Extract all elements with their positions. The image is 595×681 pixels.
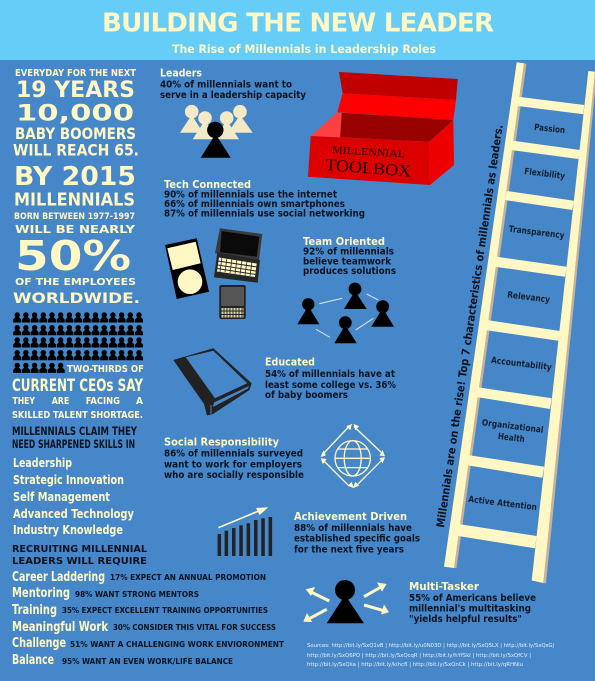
- icon: millennial toolbox: MILLENNIAL: [332, 145, 405, 160]
- panel: tech connected text: [164, 178, 365, 220]
- chart: ladder of characteristics: Passion: [534, 123, 565, 136]
- panel: recruiting requirements: 17% EXPECT AN ANNUAL PROMOTION: [110, 573, 266, 582]
- panel: educated text: of baby boomers: [265, 390, 348, 401]
- icon: tech devices: [165, 228, 262, 319]
- panel: recruiting requirements: [12, 544, 284, 668]
- icon: globe with arrows: [322, 425, 384, 487]
- sources: Sources: http://bit.ly/SxQ1vB | http://bit.ly/u0N03D | http://bit.ly/SxQ5LX | http://bit.ly/SxQsGj: [307, 643, 554, 649]
- panel: CEO statistic: CURRENT CEOs SAY: [12, 376, 144, 395]
- panel: tech connected text: Tech Connected: [164, 178, 251, 191]
- panel: multi-tasker text: [409, 580, 536, 625]
- panel: achievement driven text: 88% of millennials have: [294, 523, 412, 534]
- panel: CEO statistic: A: [136, 396, 143, 407]
- panel: recruiting requirements: 35% EXPECT EXCELLENT TRAINING OPPORTUNITIES: [62, 606, 268, 615]
- panel: boomers statistics: WORLDWIDE.: [13, 291, 140, 307]
- icon: book: [173, 348, 252, 416]
- panel: skills millennials need: MILLENNIALS CLAIM THEY: [12, 424, 137, 438]
- panel: recruiting requirements: 95% WANT AN EVEN WORK/LIFE BALANCE: [62, 657, 233, 666]
- icon: leader pawns: [180, 105, 253, 158]
- panel: multi-tasker text: 55% of Americans believe: [409, 593, 536, 604]
- header band: [0, 0, 595, 60]
- panel: recruiting requirements: Career Laddering: [12, 570, 105, 585]
- panel: achievement driven text: for the next five years: [294, 544, 404, 556]
- panel: team oriented text: believe teamwork: [303, 256, 392, 268]
- panel: skills millennials need: Strategic Innovation: [13, 472, 124, 487]
- panel: skills millennials need: [12, 424, 137, 537]
- panel: boomers statistics: 10,000: [16, 102, 134, 126]
- panel: skills millennials need: Leadership: [13, 455, 72, 470]
- panel: leaders text: serve in a leadership capacity: [160, 90, 307, 101]
- panel: multi-tasker text: Multi-Tasker: [409, 580, 480, 593]
- panel: educated text: Educated: [265, 356, 315, 368]
- vertical caption: Millennials are on the rise! Top 7 characteristics of millennials as leaders.: [434, 124, 506, 528]
- panel: skills millennials need: Self Management: [13, 489, 110, 504]
- panel: boomers statistics: WILL REACH 65.: [13, 140, 139, 160]
- panel: boomers statistics: OF THE EMPLOYEES: [15, 277, 136, 288]
- panel: CEO statistic: TWO-THIRDS OF: [67, 364, 144, 375]
- chart: ladder of characteristics: Flexibility: [524, 167, 566, 182]
- panel: achievement driven text: Achievement Driven: [294, 510, 407, 523]
- panel: social responsibility text: who are socially responsible: [164, 470, 304, 481]
- icon: rising bar chart: [218, 507, 272, 556]
- panel: tech connected text: 90% of millennials use the internet: [164, 190, 337, 200]
- panel: recruiting requirements: 98% WANT STRONG MENTORS: [75, 590, 199, 599]
- panel: educated text: [265, 356, 396, 401]
- panel: boomers statistics: BY 2015: [14, 162, 136, 192]
- panel: team oriented text: produces solutions: [303, 266, 396, 277]
- panel: social responsibility text: want to work for employers: [164, 460, 302, 470]
- title: BUILDING THE NEW LEADER: [102, 8, 494, 38]
- panel: social responsibility text: [164, 436, 304, 481]
- icon: connected team: [297, 283, 394, 343]
- chart: ladder of characteristics: Relevancy: [507, 290, 551, 306]
- panel: recruiting requirements: 30% CONSIDER THIS VITAL FOR SUCCESS: [113, 623, 276, 632]
- chart: ladder of characteristics: Accountability: [490, 356, 552, 373]
- panel: recruiting requirements: Mentoring: [12, 586, 70, 601]
- sources: http://bit.ly/SxQiia | http://bit.ly/kihcfl | http://bit.ly/SxQnCk | http://bit.ly/qRHNiu: [307, 662, 523, 668]
- panel: boomers statistics: WILL BE NEARLY: [15, 223, 136, 236]
- chart: ladder of characteristics: Organizational: [481, 418, 544, 436]
- subtitle: The Rise of Millennials in Leadership Roles: [172, 42, 436, 56]
- icon: millennial toolbox: TOOLBOX: [325, 155, 412, 181]
- panel: team oriented text: [303, 235, 396, 277]
- chart: ladder of characteristics: Active Attention: [468, 495, 537, 513]
- panel: recruiting requirements: RECRUITING MILLENNIAL: [12, 544, 147, 555]
- chart: ladder of characteristics: Health: [497, 432, 525, 445]
- panel: boomers statistics: 50%: [15, 232, 131, 280]
- panel: CEO statistic: SKILLED TALENT SHORTAGE.: [12, 410, 143, 421]
- panel: educated text: least some college vs. 36%: [265, 380, 396, 391]
- icon: multitasker with arrows: [303, 580, 389, 623]
- panel: team oriented text: Team Oriented: [303, 235, 385, 248]
- panel: boomers statistics: BORN BETWEEN 1977-1997: [14, 212, 135, 222]
- panel: boomers statistics: BABY BOOMERS: [15, 124, 136, 143]
- panel: skills millennials need: Advanced Technology: [13, 506, 134, 521]
- panel: achievement driven text: [294, 510, 420, 556]
- panel: CEO statistic: ARE: [52, 396, 69, 407]
- panel: skills millennials need: NEED SHARPENED SKILLS IN: [12, 437, 135, 451]
- panel: recruiting requirements: LEADERS WILL REQUIRE: [12, 556, 147, 567]
- chart: ladder of characteristics: [444, 62, 595, 584]
- panel: social responsibility text: 86% of millennials surveyed: [164, 448, 303, 460]
- panel: recruiting requirements: Training: [12, 603, 57, 618]
- sources: http://bit.ly/SxQ6PO | http://bit.ly/SxQcqR | http://bit.ly/hYfSkl | http://bit.ly/SxQfCV |: [307, 653, 531, 659]
- panel: multi-tasker text: "yields helpful results": [409, 614, 522, 625]
- panel: achievement driven text: established specific goals: [294, 534, 420, 544]
- panel: boomers statistics: [13, 68, 140, 307]
- panel: leaders text: 40% of millennials want to: [160, 80, 292, 90]
- chart: ladder of characteristics: Transparency: [508, 225, 565, 241]
- panel: tech connected text: 87% of millennials use social networking: [164, 208, 365, 220]
- panel: CEO statistic: THEY: [12, 396, 36, 407]
- panel: recruiting requirements: Balance: [12, 653, 54, 668]
- icon: rows of people: [13, 312, 143, 373]
- panel: boomers statistics: MILLENNIALS: [14, 190, 135, 210]
- panel: CEO statistic: [12, 364, 144, 421]
- panel: educated text: 54% of millennials have at: [265, 369, 395, 380]
- panel: recruiting requirements: 51% WANT A CHALLENGING WORK ENVIORONMENT: [70, 640, 284, 649]
- panel: boomers statistics: EVERYDAY FOR THE NEXT: [15, 68, 136, 79]
- panel: boomers statistics: 19 YEARS: [16, 78, 135, 103]
- sources: [307, 643, 554, 668]
- panel: skills millennials need: Industry Knowledge: [13, 522, 123, 537]
- panel: recruiting requirements: Challenge: [12, 636, 66, 651]
- panel: tech connected text: 66% of millennials own smartphones: [164, 199, 345, 210]
- panel: leaders text: [160, 66, 307, 101]
- panel: multi-tasker text: millennial's multitasking: [409, 604, 531, 614]
- panel: recruiting requirements: Meaningful Work: [12, 620, 108, 635]
- panel: CEO statistic: FACING: [86, 396, 120, 407]
- panel: team oriented text: 92% of millennials: [303, 246, 394, 258]
- panel: leaders text: Leaders: [160, 66, 202, 80]
- panel: social responsibility text: Social Responsibility: [164, 436, 279, 448]
- icon: millennial toolbox: [308, 72, 458, 185]
